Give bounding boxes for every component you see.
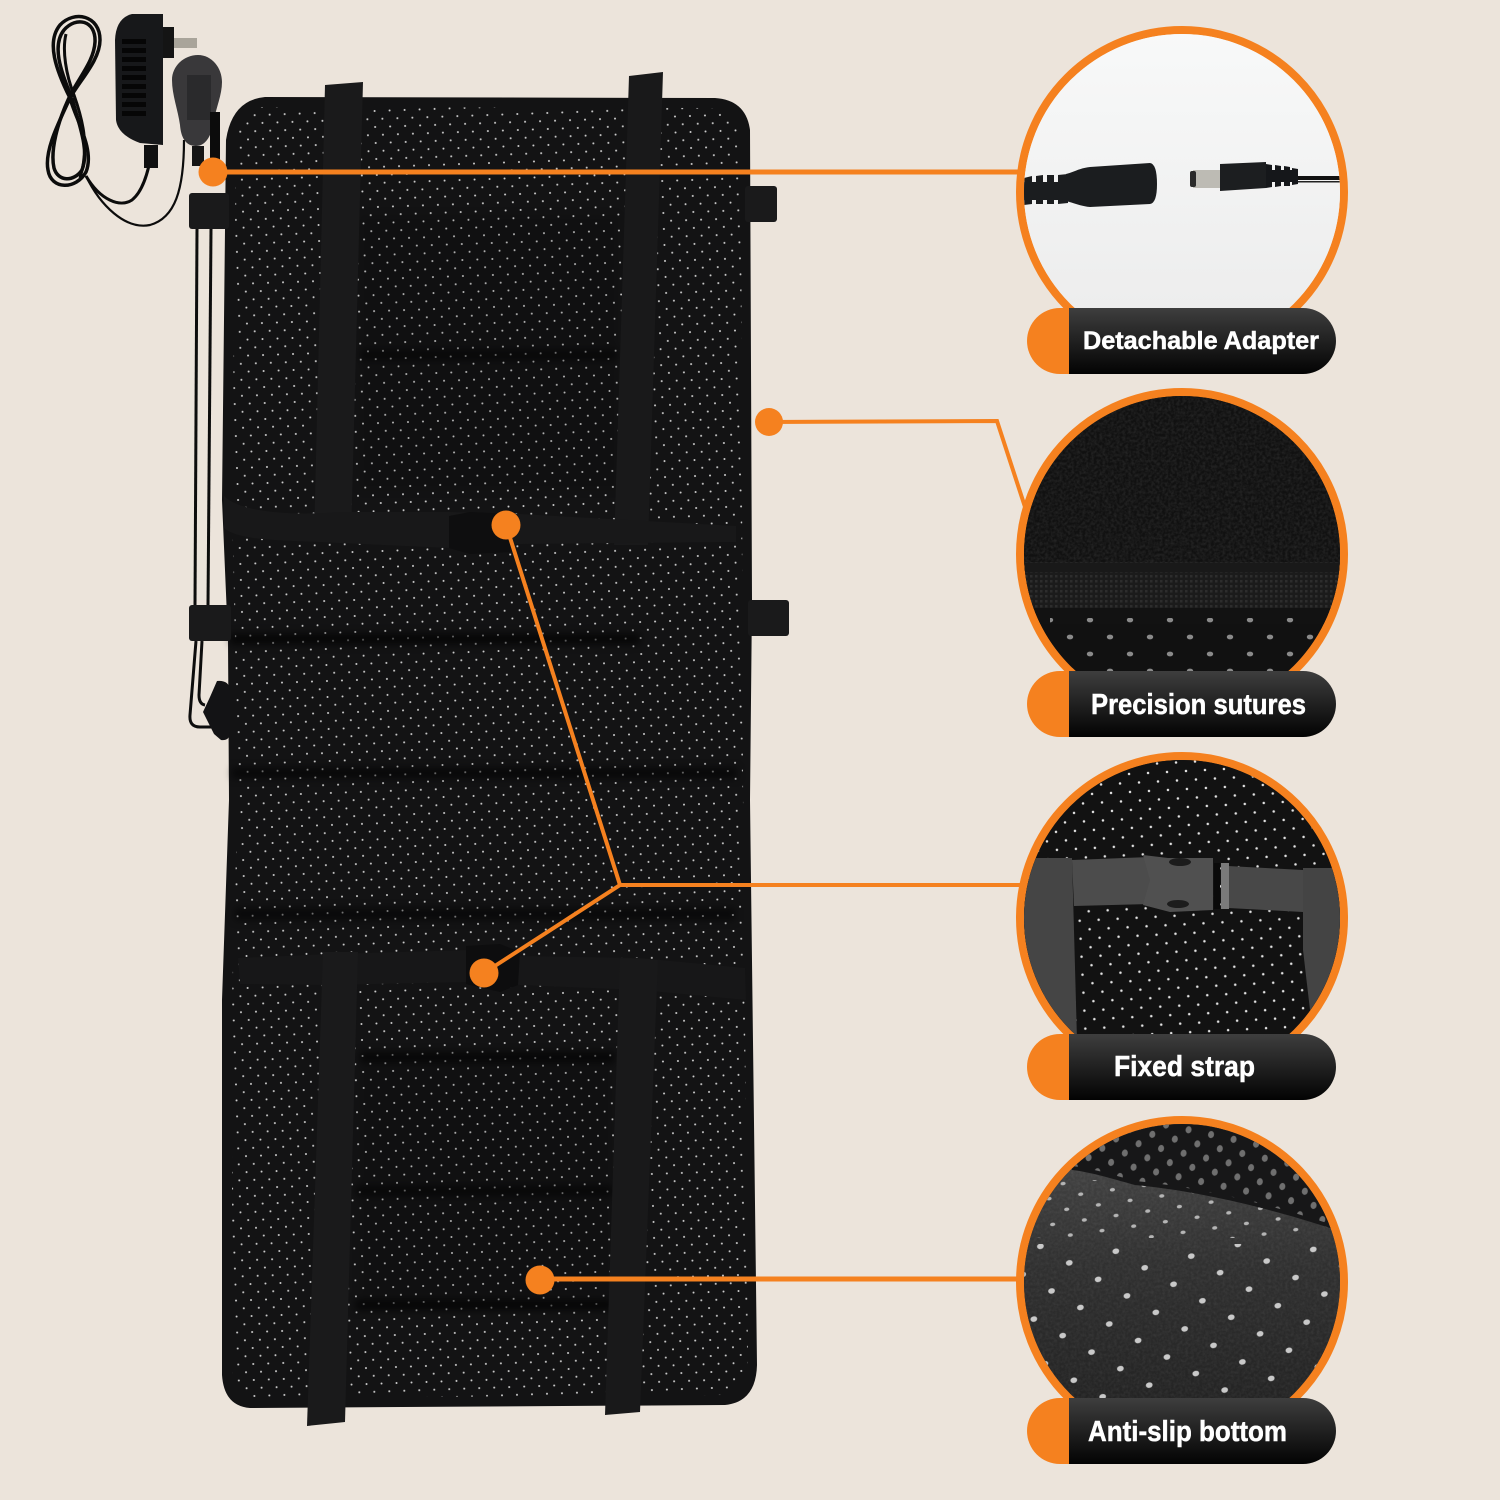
buckle (1143, 855, 1213, 912)
control box (172, 55, 222, 146)
side tab: top right (745, 186, 777, 222)
side tab: top left (189, 193, 229, 229)
perforations (1050, 618, 1314, 671)
strap: lower vertical left (307, 952, 358, 1426)
connector: female socket (1024, 163, 1157, 207)
upper fold (1072, 1124, 1330, 1228)
horizontal strap (1072, 857, 1150, 906)
dot: sutures (755, 408, 783, 436)
panel: anti-slip bottom (1020, 1120, 1344, 1464)
side straps (1024, 858, 1077, 1034)
label pill: Fixed strap (1114, 1051, 1255, 1083)
icon: cord switch (203, 681, 230, 740)
connector: male plug (1190, 162, 1342, 191)
panel: precision sutures (1020, 392, 1344, 737)
power cord along mat (190, 229, 212, 727)
strain relief (144, 145, 158, 168)
label pill (1027, 671, 1336, 737)
strap: lower horizontal (238, 950, 746, 1000)
label pill (1027, 1398, 1336, 1464)
leader: detachable adapter (213, 170, 1020, 174)
label pill: Detachable Adapter (1083, 327, 1319, 355)
side tab: middle left (189, 605, 231, 641)
callout lines (213, 172, 1026, 1279)
plug prongs (163, 27, 174, 58)
buckle: lower (466, 944, 520, 992)
icon: power adapter with coiled cable (47, 14, 222, 226)
cable coil (47, 17, 184, 226)
callout dots (198, 158, 783, 1294)
panel: fixed strap (1020, 756, 1344, 1100)
label pill: Anti-slip bottom (1088, 1416, 1287, 1448)
dot: adapter (198, 158, 228, 186)
dot: bottom (526, 1266, 554, 1294)
dot: upper buckle (492, 510, 520, 540)
leader: fixed strap (484, 525, 1020, 973)
panel: detachable adapter (1020, 30, 1344, 374)
panel: heated mat (189, 72, 789, 1426)
strap: upper vertical left (314, 82, 363, 540)
dot: lower buckle (470, 958, 498, 988)
label pill (1027, 308, 1336, 374)
fold shadows (230, 215, 737, 1310)
adapter body (115, 14, 163, 145)
leader: anti-slip bottom (540, 1276, 1020, 1282)
side tab: middle right (748, 600, 789, 636)
seam band (1020, 562, 1344, 610)
perforated surface (232, 107, 748, 1398)
label pill (1027, 1034, 1336, 1100)
buckle: upper (449, 512, 512, 554)
leader: precision sutures (769, 421, 1026, 510)
strap: upper vertical right (614, 72, 663, 545)
label pill: Precision sutures (1091, 689, 1306, 721)
strap: lower vertical right (605, 958, 658, 1415)
strap: upper horizontal (224, 496, 736, 548)
